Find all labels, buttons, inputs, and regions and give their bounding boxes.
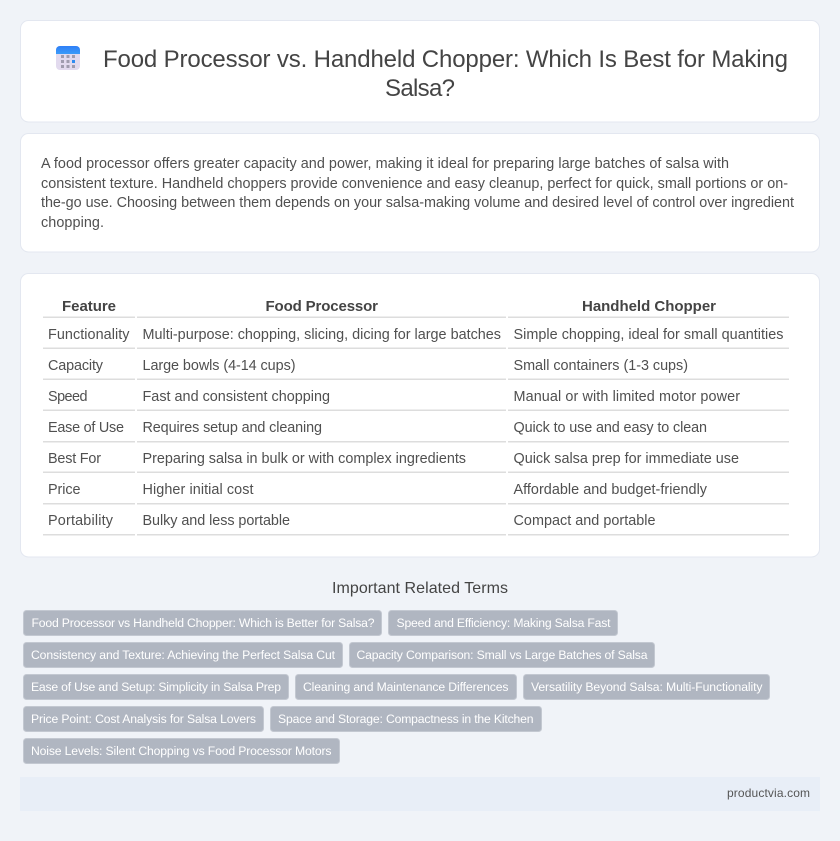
panel: comparison table <box>20 274 820 557</box>
tag: Speed and Efficiency: Making Salsa Fast <box>396 616 611 630</box>
row: portability: Compact and portable <box>514 513 656 529</box>
panel: header <box>20 20 820 122</box>
tag: Noise Levels: Silent Chopping vs Food Processor Motors <box>31 744 332 758</box>
row: capacity: Capacity <box>48 358 104 374</box>
tag: Versatility Beyond Salsa: Multi-Functionality <box>531 680 763 694</box>
row: price: Price <box>48 482 80 498</box>
tag <box>270 706 542 732</box>
table header row: Feature <box>62 298 116 315</box>
table header row: Food Processor <box>266 298 378 315</box>
row: functionality <box>48 327 784 343</box>
row: best for: Best For <box>48 451 101 467</box>
tag: Cleaning and Maintenance Differences <box>303 680 508 694</box>
tag: Capacity Comparison: Small vs Large Batches of Salsa <box>356 648 648 662</box>
row: speed: Manual or with limited motor power <box>514 389 740 405</box>
table header row <box>62 298 716 315</box>
row: speed: Fast and consistent chopping <box>142 389 330 405</box>
tag: Consistency and Texture: Achieving the Perfect Salsa Cut <box>31 648 336 662</box>
tag <box>24 642 342 668</box>
tag <box>350 642 654 668</box>
row: portability: Bulky and less portable <box>142 513 290 529</box>
row: portability <box>48 513 656 529</box>
tag <box>24 674 288 700</box>
row: functionality: Multi-purpose: chopping, slicing, dicing for large batches <box>142 327 501 343</box>
row: ease of use: Quick to use and easy to clean <box>514 420 707 436</box>
tag: Price Point: Cost Analysis for Salsa Lovers <box>31 712 256 726</box>
table header row: Handheld Chopper <box>582 298 716 315</box>
tag: Space and Storage: Compactness in the Kitchen <box>278 712 534 726</box>
text block: introduction <box>41 156 794 231</box>
row: best for <box>48 451 739 467</box>
panel: introduction <box>20 134 820 252</box>
heading: important related terms: Important Related Terms <box>332 580 508 597</box>
title: Food Processor vs. Handheld Chopper: Which Is Best for Making <box>103 46 788 73</box>
footer <box>20 777 820 811</box>
title <box>103 46 788 102</box>
footer: productvia.com <box>727 786 810 800</box>
row: capacity: Small containers (1-3 cups) <box>514 358 688 374</box>
tag <box>296 674 516 700</box>
row: price <box>48 482 708 498</box>
row: functionality: Simple chopping, ideal for small quantities <box>514 327 784 343</box>
tag: Ease of Use and Setup: Simplicity in Salsa Prep <box>31 680 281 694</box>
tag <box>524 674 770 700</box>
icon: calendar <box>56 46 80 70</box>
text block: introduction: consistent texture. Handheld choppers provide convenience and easy cleanup, perfect for quick, small portions or on- <box>41 176 788 192</box>
row: best for: Preparing salsa in bulk or with complex ingredients <box>142 451 466 467</box>
row: ease of use: Requires setup and cleaning <box>142 420 322 436</box>
panel: related term tags <box>24 610 770 764</box>
row: price: Higher initial cost <box>142 482 254 498</box>
row: portability: Portability <box>48 513 114 529</box>
title: Salsa? <box>385 75 455 102</box>
row: speed <box>48 389 740 405</box>
row: ease of use <box>48 420 707 436</box>
tag: Food Processor vs Handheld Chopper: Which is Better for Salsa? <box>32 616 375 630</box>
row: capacity: Large bowls (4-14 cups) <box>142 358 296 374</box>
tag <box>24 738 340 764</box>
text block: introduction: the-go use. Choosing between them depends on your salsa-making volume and desired level of control over ingredient <box>41 195 794 211</box>
tag <box>388 610 618 636</box>
text block: introduction: chopping. <box>41 215 104 231</box>
row: functionality: Functionality <box>48 327 130 343</box>
row: ease of use: Ease of Use <box>48 420 124 436</box>
row: speed: Speed <box>48 389 88 405</box>
row: capacity <box>48 358 688 374</box>
row: best for: Quick salsa prep for immediate use <box>514 451 739 467</box>
text block: introduction: A food processor offers greater capacity and power, making it ideal for preparing large batches of salsa with <box>41 156 729 172</box>
tag <box>24 610 382 636</box>
tag <box>24 706 264 732</box>
row: price: Affordable and budget-friendly <box>514 482 708 498</box>
